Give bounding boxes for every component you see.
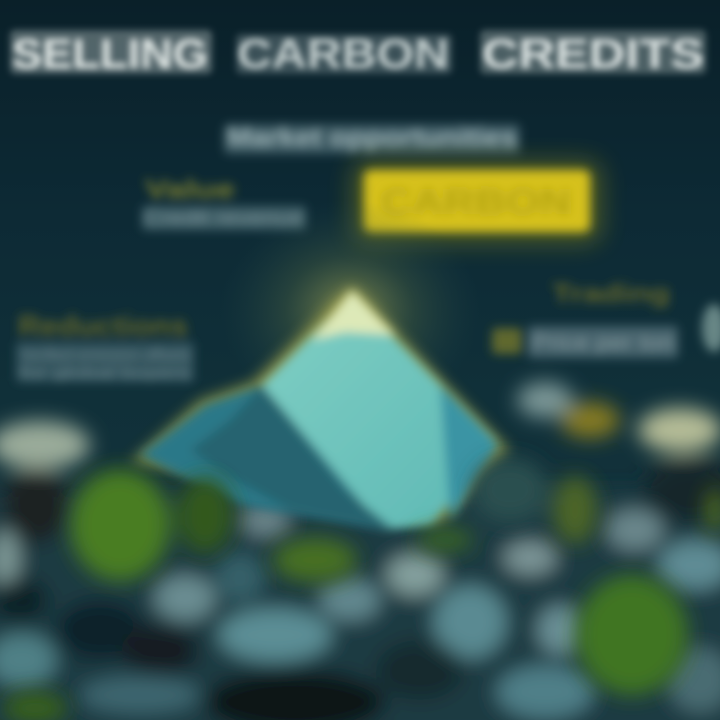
text block: upper left label: Credit revenue (144, 208, 304, 228)
text block: left label: Reductions (18, 310, 188, 343)
text block: right label: Price per ton (532, 332, 674, 354)
rocks foreground (0, 382, 720, 720)
text block: left label: Verified emission offsets (20, 347, 190, 364)
title: SELLING (12, 30, 208, 77)
text block: right label (492, 278, 720, 358)
subtitle: Market opportunities (227, 122, 517, 152)
text block: left label: for global buyers (20, 365, 190, 382)
title (10, 30, 706, 77)
text block: right label: Trading (552, 278, 670, 308)
text block: upper left label (142, 174, 306, 230)
chart: mountain peak with glow (130, 200, 510, 530)
text block: upper left label: Value (145, 174, 235, 204)
title: CARBON (237, 30, 449, 77)
icon: moss clumps (3, 458, 720, 720)
callout: yellow button: CARBON (381, 181, 571, 222)
callout: yellow button (352, 160, 602, 244)
text block: left label (16, 310, 194, 382)
title: CREDITS (482, 30, 704, 77)
